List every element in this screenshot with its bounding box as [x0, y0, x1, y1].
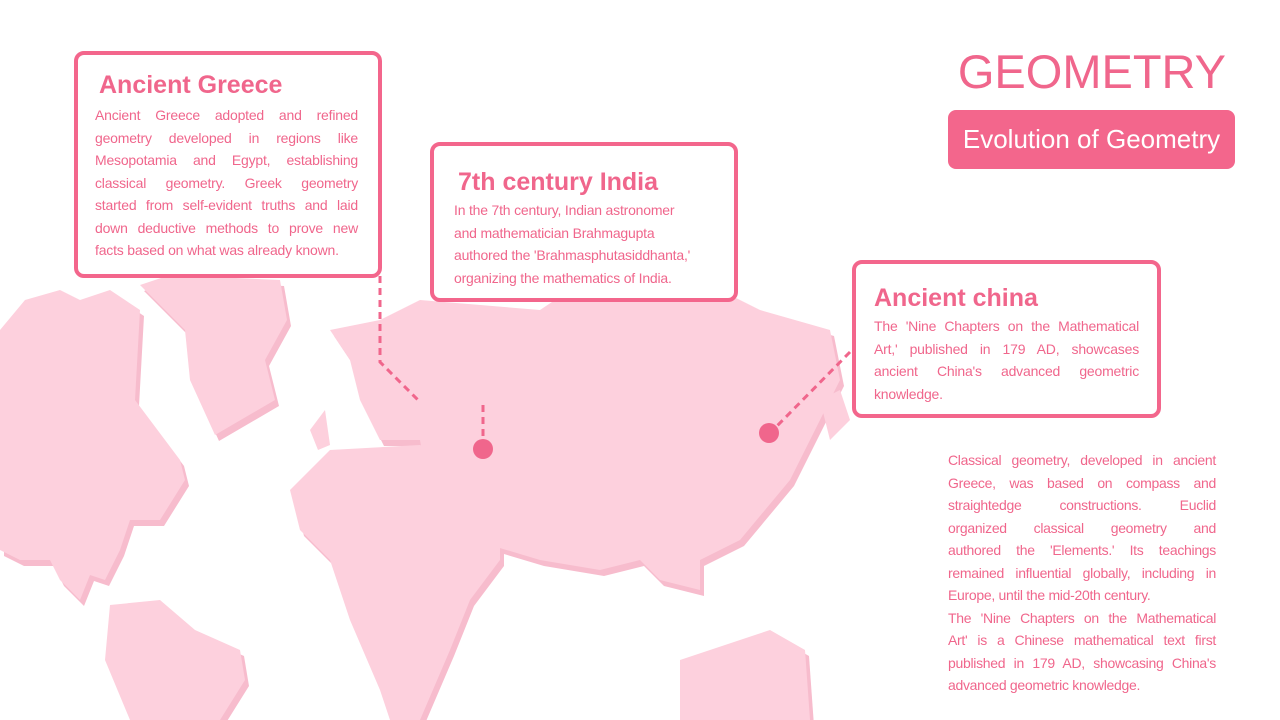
heading: Ancient Greece: Ancient Greece — [99, 71, 282, 99]
text: India: and mathematician Brahmagupta — [454, 224, 654, 240]
text: summary: straightedge constructions. Euclid — [948, 497, 1216, 513]
text: Greece: classical geometry. Greek geometry — [95, 174, 358, 190]
text: summary — [948, 452, 1216, 693]
subtitle pill: Evolution of Geometry — [963, 124, 1220, 154]
text: summary: advanced geometric knowledge. — [948, 677, 1140, 693]
text: Greece — [95, 107, 358, 258]
text: China: The 'Nine Chapters on the Mathematical — [874, 318, 1139, 334]
subtitle pill — [948, 110, 1235, 169]
text: summary: authored the 'Elements.' Its teachings — [948, 542, 1216, 558]
text: India: In the 7th century, Indian astronomer — [454, 202, 674, 218]
text: summary: The 'Nine Chapters on the Mathematical — [948, 610, 1216, 626]
text: China — [874, 318, 1139, 402]
text: China: Art,' published in 179 AD, showcases — [874, 340, 1139, 356]
text: China: knowledge. — [874, 386, 943, 402]
text: summary: Greece, was based on compass and — [948, 474, 1216, 490]
title: GEOMETRY — [958, 45, 1226, 98]
text: summary: published in 179 AD, showcasing China's — [948, 654, 1216, 670]
panel: Ancient Greece — [74, 51, 382, 278]
text: summary: organized classical geometry and — [948, 520, 1216, 536]
text: China: ancient China's advanced geometric — [874, 363, 1139, 379]
text: summary: remained influential globally, including in — [948, 564, 1216, 580]
text: Greece: Mesopotamia and Egypt, establishing — [95, 152, 358, 168]
text: summary: Art' is a Chinese mathematical text first — [948, 632, 1216, 648]
heading: India: 7th century India — [458, 168, 658, 196]
text: summary: Europe, until the mid-20th century. — [948, 587, 1150, 603]
text: summary: Classical geometry, developed in ancient — [948, 452, 1216, 468]
panel: Ancient china — [852, 260, 1161, 418]
heading: China: Ancient china — [874, 284, 1038, 312]
text: Greece: started from self-evident truths and laid — [95, 197, 358, 213]
connector lines and dots — [380, 240, 850, 440]
text: Greece: Ancient Greece adopted and refined — [95, 107, 358, 123]
panel: 7th century India — [430, 142, 738, 302]
text: Greece: down deductive methods to prove new — [95, 220, 358, 236]
text: India: authored the 'Brahmasphutasiddhanta,' — [454, 247, 690, 263]
text: Greece: geometry developed in regions like — [95, 130, 358, 146]
text: Greece: facts based on what was already known. — [95, 242, 339, 258]
text: India — [454, 202, 690, 286]
text: India: organizing the mathematics of India. — [454, 270, 672, 286]
